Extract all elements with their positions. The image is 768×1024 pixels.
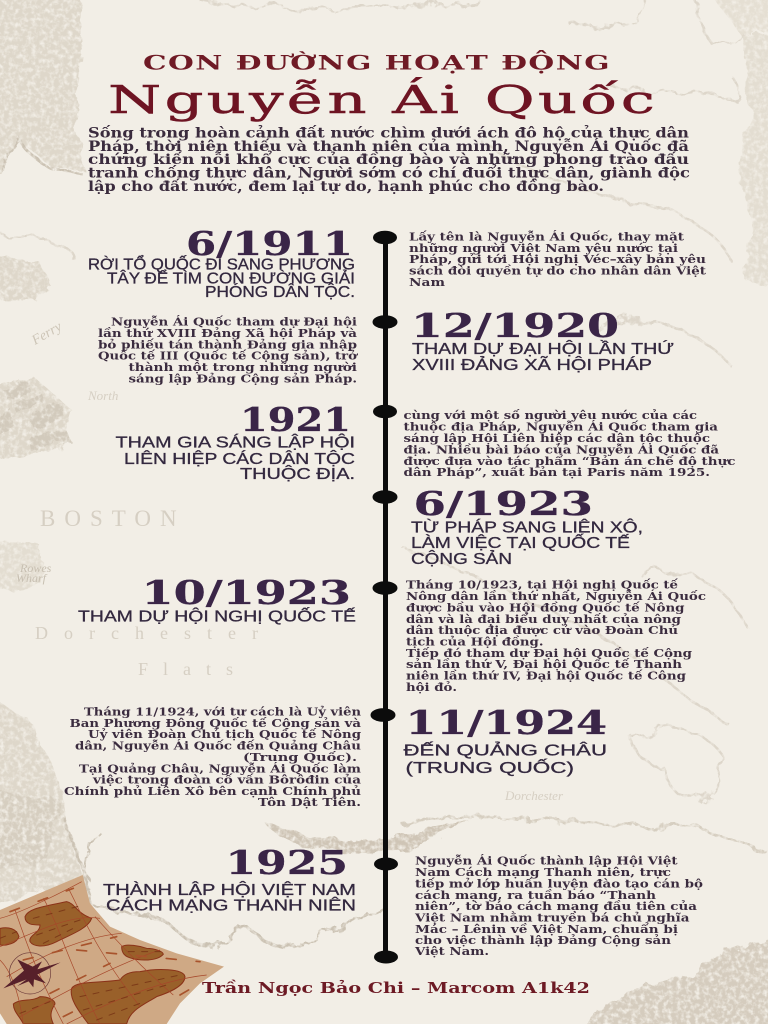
label: LÀM VIỆC TẠI QUỐC TẾ	[411, 534, 630, 552]
description: bỏ phiếu tán thành Đảng gia nhập	[98, 338, 357, 352]
date: 6/1923	[414, 484, 593, 523]
event: 1925	[103, 843, 703, 958]
description: tịch của Hội đồng.	[406, 634, 544, 648]
date: 1921	[240, 400, 351, 439]
description: Nông dân lần thứ nhất, Nguyễn Ái Quốc	[406, 589, 706, 603]
heading: name: Nguyễn Ái Quốc	[108, 78, 658, 122]
description: thuộc địa Pháp, Nguyễn Ái Quốc tham gia	[404, 420, 719, 434]
label: (TRUNG QUỐC)	[406, 759, 574, 777]
background: antique map paper: Flats	[138, 659, 248, 679]
description: Chính phủ Liên Xô bên cạnh Chính phủ	[64, 784, 362, 798]
intro paragraph: Pháp, thời niên thiếu và thanh niên của mình, Nguyễn Ái Quốc đã	[88, 139, 689, 155]
description: dân và là đại biểu duy nhất của nông	[406, 612, 681, 626]
background: antique map paper: Dorchester	[504, 788, 564, 803]
label: TÂY ĐỂ TÌM CON ĐƯỜNG GIẢI	[107, 270, 355, 288]
event: 10/1923	[78, 573, 706, 694]
description: được đưa vào tác phẩm “Bản án chế độ thực	[404, 454, 736, 468]
background: antique map paper: BOSTON	[40, 506, 186, 531]
description: cho việc thành lập Đảng Cộng sản	[415, 933, 672, 947]
event: 6/1923	[411, 484, 643, 568]
description: (Trung Quốc).	[243, 750, 357, 764]
description: tiếp mở lớp huấn luyện đào tạo cán bộ	[415, 876, 703, 890]
description: được bầu vào Hội đồng Quốc tế Nông	[406, 600, 684, 614]
background: antique map paper: Dorchester	[35, 623, 274, 643]
description: việc trong đoàn cố vấn Bôrôđin của	[92, 772, 362, 786]
description: Việt Nam.	[414, 944, 489, 958]
background: antique map paper: Rowes	[19, 561, 52, 575]
description: Pháp, gửi tới Hội nghị Véc–xây bản yêu	[409, 252, 707, 266]
intro paragraph: tranh chống thực dân, Người sớm có chí đuổi thực dân, giành độc	[88, 166, 690, 182]
description: hội đỏ.	[406, 680, 457, 694]
label: TỪ PHÁP SANG LIÊN XÔ,	[411, 520, 643, 536]
label: LIÊN HIỆP CÁC DÂN TỘC	[124, 451, 355, 468]
description: Tại Quảng Châu, Nguyễn Ái Quốc làm	[79, 762, 361, 776]
description: Quốc tế III (Quốc tế Cộng sản), trở	[98, 348, 358, 362]
description	[414, 854, 703, 958]
description: niên”, tờ báo cách mạng đầu tiên của	[415, 899, 698, 913]
description: Ban Phương Đông Quốc tế Cộng sản và	[70, 716, 362, 730]
description: niên lần thứ IV, Đại hội Quốc tế Công	[406, 668, 686, 682]
date: 10/1923	[142, 573, 351, 612]
label: CỘNG SẢN	[411, 551, 512, 568]
description	[404, 408, 736, 479]
label	[88, 256, 355, 301]
background: antique map paper: Ferry	[29, 319, 65, 349]
event: 6/1911	[88, 224, 707, 301]
description: Tôn Dật Tiên.	[258, 795, 361, 809]
description: cách mạng, ra tuần báo “Thanh	[415, 888, 657, 902]
label: THÀNH LẬP HỘI VIỆT NAM	[103, 882, 356, 899]
map illustration with compass	[0, 875, 224, 1024]
description	[98, 314, 358, 386]
description: Mác – Lênin về Việt Nam, chuẩn bị	[415, 922, 679, 936]
description: Tháng 11/1924, với tư cách là Uỷ viên	[84, 704, 362, 718]
event: 1921	[116, 400, 736, 483]
date: 11/1924	[406, 703, 607, 742]
description: Lấy tên là Nguyễn Ái Quốc, thay mặt	[409, 230, 685, 244]
credit line: Trần Ngọc Bảo Chi – Marcom A1k42	[202, 980, 590, 997]
date: 6/1911	[186, 224, 353, 263]
description: Việt Nam nhằm truyền bá chủ nghĩa	[414, 910, 690, 924]
label	[412, 341, 674, 374]
description: cùng với một số người yêu nước của các	[404, 408, 697, 422]
heading: kicker: CON ĐƯỜNG HOẠT ĐỘNG	[143, 48, 611, 74]
description: lần thứ XVIII Đảng Xã hội Pháp và	[98, 326, 358, 340]
description: Tháng 10/1923, tại Hội nghị Quốc tế	[406, 578, 679, 592]
background: antique map paper: North	[87, 388, 118, 403]
description: sáng lập Hội Liên hiệp các dân tộc thuộc	[404, 431, 710, 445]
label: THAM DỰ HỘI NGHỊ QUỐC TẾ	[78, 608, 356, 626]
label	[404, 742, 607, 777]
date: 1925	[226, 843, 348, 882]
description: Uỷ viên Đoàn Chủ tịch Quốc tế Nông	[88, 727, 361, 741]
description: Tiếp đó tham dự Đại hội Quốc tế Cộng	[406, 646, 692, 660]
description: Nam Cách mạng Thanh niên, trực	[415, 865, 671, 879]
label: XVIII ĐẢNG XÃ HỘI PHÁP	[412, 357, 652, 374]
icon: compass rose	[3, 953, 61, 994]
description: Nguyễn Ái Quốc thành lập Hội Việt	[415, 854, 678, 868]
description	[409, 230, 707, 289]
label: THAM DỰ ĐẠI HỘI LẦN THỨ	[412, 341, 674, 358]
timeline axis	[370, 231, 398, 963]
label: THUỘC ĐỊA.	[240, 466, 355, 483]
date: 12/1920	[411, 306, 619, 345]
label: ĐẾN QUẢNG CHÂU	[404, 742, 607, 760]
title	[108, 48, 658, 122]
label: CÁCH MẠNG THANH NIÊN	[106, 898, 356, 914]
label: PHÓNG DÂN TỘC.	[205, 284, 355, 301]
intro paragraph	[88, 126, 690, 195]
description: Nguyễn Ái Quốc tham dự Đại hội	[111, 314, 358, 328]
label	[116, 434, 355, 483]
description: địa. Nhiều bài báo của Nguyễn Ái Quốc đã	[404, 442, 720, 456]
label	[103, 882, 356, 914]
event: 11/1924	[64, 703, 607, 809]
intro paragraph: chứng kiến nỗi khổ cực của đồng bào và những phong trào đấu	[88, 152, 689, 168]
label	[411, 520, 643, 568]
background: antique map paper: Wharf	[16, 571, 48, 585]
description	[406, 578, 706, 694]
description: sáng lập Đảng Cộng sản Pháp.	[128, 372, 357, 386]
description: Nam	[409, 275, 445, 289]
description	[64, 704, 362, 809]
description: dân, Nguyễn Ái Quốc đến Quảng Châu	[75, 738, 362, 752]
intro paragraph: Sống trong hoàn cảnh đất nước chìm dưới ách đô hộ của thực dân	[88, 126, 689, 142]
event: 12/1920	[98, 306, 674, 386]
description: dân thuộc địa được cử vào Đoàn Chủ	[406, 623, 679, 637]
description: sản lần thứ V, Đại hội Quốc tế Thanh	[406, 657, 683, 671]
label: THAM GIA SÁNG LẬP HỘI	[116, 434, 355, 452]
description: những người Việt Nam yêu nước tại	[409, 241, 679, 255]
description: dân Pháp”, xuất bản tại Paris năm 1925.	[404, 465, 710, 479]
label: RỜI TỔ QUỐC ĐI SANG PHƯƠNG	[88, 256, 355, 274]
description: thành một trong những người	[128, 360, 358, 374]
intro paragraph: lập cho đất nước, đem lại tự do, hạnh phúc cho đồng bào.	[88, 179, 604, 195]
description: sách đòi quyền tự do cho nhân dân Việt	[409, 264, 707, 278]
